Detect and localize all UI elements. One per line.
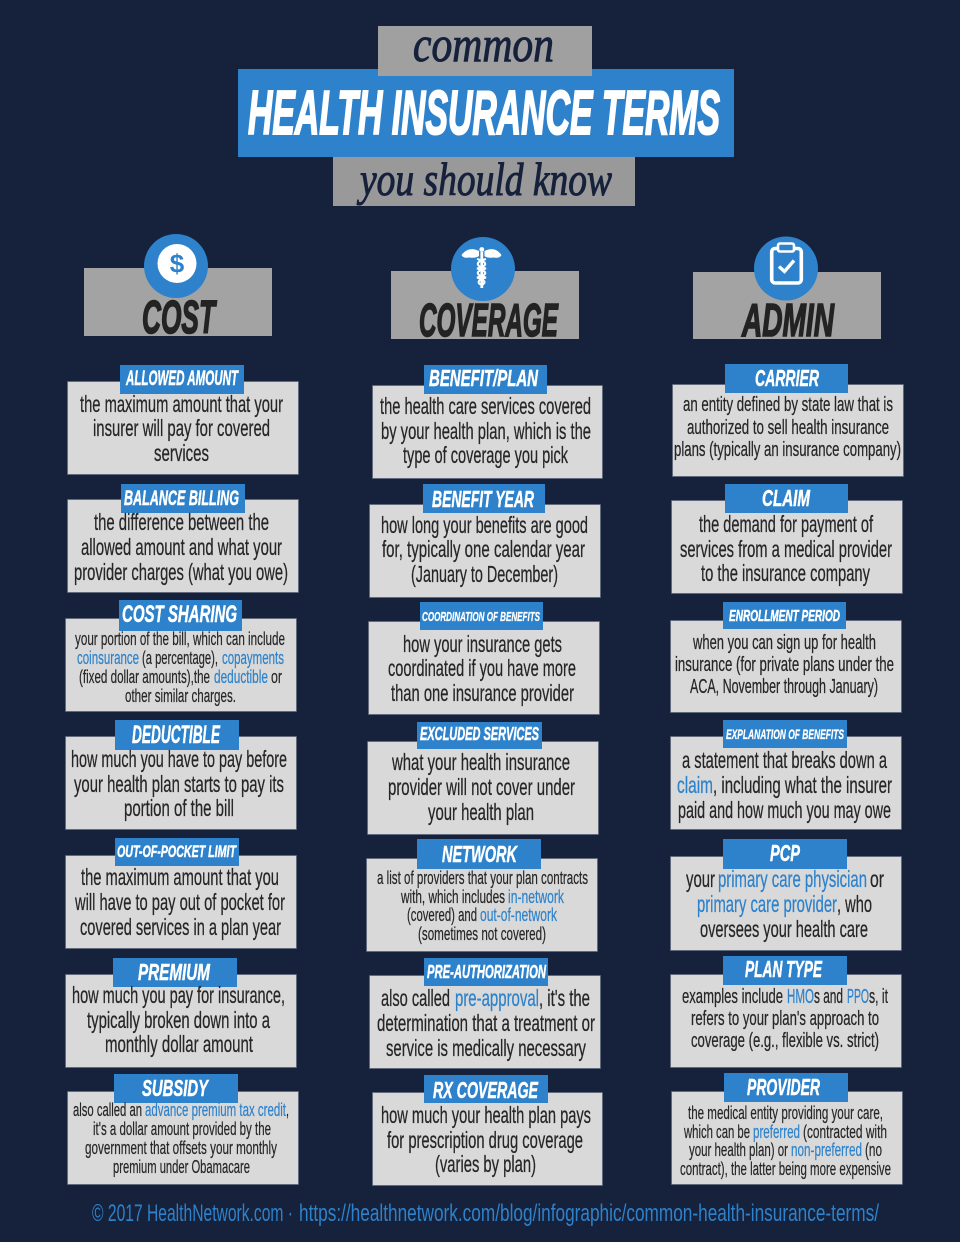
label [723,956,847,985]
definition: (contracted with [803,1122,887,1142]
definition: services [154,440,209,466]
definition: (a percentage), [142,648,218,668]
card: claim [672,484,902,594]
label: SUBSIDY [142,1075,210,1101]
icon: clipboard with check [754,236,818,300]
label [424,365,547,394]
card: enrollment period [670,602,902,712]
definition: , [286,1100,289,1120]
definition: out-of-network [480,905,558,925]
card: premium [66,958,296,1068]
card: allowed amount [68,365,298,474]
label [723,720,847,748]
definition: or [271,667,282,687]
definition [680,1103,891,1179]
definition: claim [677,772,713,798]
card: pcp [670,839,902,950]
column header: admin: ADMIN [741,294,834,346]
card: pre-authorization [370,958,600,1068]
label [424,1075,548,1103]
label [417,839,541,869]
card: deductible [66,720,296,830]
definition [674,394,901,461]
card: out-of-pocket limit [66,838,296,948]
card: coordination of benefits [368,602,600,714]
definition: for prescription drug coverage [387,1127,583,1153]
definition: premium under Obamacare [113,1157,250,1177]
icon: dollar sign: $ [170,248,185,278]
definition: by your health plan, which is the [381,418,591,444]
definition: to the insurance company [701,560,870,586]
definition: portion of the bill [124,795,234,821]
definition: covered services in a plan year [80,914,281,940]
definition: (varies by plan) [435,1151,536,1177]
definition [80,391,283,466]
card: benefit/plan [372,365,602,478]
definition [72,982,285,1057]
definition: how much your health plan pays [381,1102,591,1128]
definition: oversees your health care [700,916,868,942]
definition: , it's the [539,985,590,1011]
column header: admin [693,236,881,346]
label [115,838,239,866]
card: excluded services [368,722,598,834]
definition: with, which includes [400,887,505,907]
label: ENROLLMENT PERIOD [729,608,840,625]
label [114,1074,238,1103]
label: EXPLANATION OF BENEFITS [726,726,844,742]
definition [388,749,575,825]
footer source line [92,1200,879,1227]
label: CLAIM [762,485,811,511]
definition [73,1100,289,1177]
label: PROVIDER [747,1074,820,1100]
title block [238,16,734,206]
definition: primary care provider [697,891,837,917]
label [725,364,848,393]
definition [381,1102,591,1177]
label: BENEFIT/PLAN [429,365,538,391]
definition: your portion of the bill, which can include [75,629,285,649]
definition: a list of providers that your plan contracts [377,868,588,888]
definition: deductible [214,667,268,687]
definition: PPO [847,986,869,1008]
definition: preferred [753,1122,800,1142]
label: OUT-OF-POCKET LIMIT [117,842,237,861]
label [723,839,847,869]
label: NETWORK [442,841,518,867]
definition: type of coverage you pick [403,442,568,468]
definition: your [686,866,715,892]
label [724,1073,848,1102]
label: ALLOWED AMOUNT [125,367,239,390]
definition [380,393,591,468]
title: you should know: you should know [357,154,612,206]
label: PCP [770,840,800,866]
definition: your health plan [428,799,534,825]
title: health insurance terms [238,69,734,157]
definition: will have to pay out of pocket for [74,889,285,915]
definition: s and [814,986,843,1008]
definition [686,866,884,942]
definition: (sometimes not covered) [418,924,546,944]
column header: coverage: COVERAGE [419,294,559,346]
definition: (January to December) [411,561,558,587]
definition: allowed amount and what your [81,534,282,560]
definition: how long your benefits are good [381,512,588,538]
column header: cost [84,234,272,343]
definition: determination that a treatment or [377,1010,595,1036]
definition [680,511,892,586]
footer source line: © 2017 HealthNetwork.com · [92,1200,293,1227]
definition: monthly dollar amount [105,1031,253,1057]
card: cost sharing [66,600,296,712]
definition: s, it [869,986,888,1008]
card: carrier [672,364,904,476]
definition: , who [837,891,872,917]
definition: provider charges (what you owe) [74,559,288,585]
definition: how much you pay for insurance, [72,982,285,1008]
definition: government that offsets your monthly [85,1138,277,1158]
card: explanation of benefits [670,720,902,830]
definition [75,629,285,706]
definition [74,864,285,940]
definition [381,512,588,587]
icon: caduceus [451,237,515,301]
definition: service is medically necessary [386,1035,586,1061]
label: COST SHARING [122,601,237,628]
definition [682,986,888,1052]
label [725,484,848,513]
definition: the maximum amount that your [80,391,283,417]
definition: non-preferred [791,1140,862,1160]
label [420,602,543,630]
column header: coverage [391,237,579,346]
column header: cost: COST [142,291,217,343]
definition [377,985,595,1061]
definition [377,868,588,944]
label: COORDINATION OF BENEFITS [422,609,540,624]
definition: examples include [682,986,783,1008]
definition: what your health insurance [391,749,570,775]
label: CARRIER [755,365,819,391]
label: BENEFIT YEAR [432,486,534,512]
icon: dollar sign [144,234,208,298]
label: DEDUCTIBLE [132,721,221,749]
definition: (covered) and [407,905,477,925]
definition: your health plan) or [689,1140,788,1160]
definition: insurer will pay for covered [93,415,270,441]
definition: in-network [508,887,565,907]
label [424,958,548,986]
definition: pre-approval [455,985,539,1011]
definition [74,509,288,585]
label: EXCLUDED SERVICES [420,724,539,744]
definition: copayments [222,648,284,668]
definition: advance premium tax credit [145,1100,286,1120]
definition: typically broken down into a [87,1007,270,1033]
card: provider [672,1073,902,1184]
label: PREMIUM [138,959,211,985]
definition [675,632,894,698]
card: subsidy [68,1074,298,1184]
definition [71,746,287,821]
definition: the difference between the [94,509,269,535]
definition: the health care services covered [380,393,591,419]
label: RX COVERAGE [433,1077,538,1103]
definition: it's a dollar amount provided by the [93,1119,271,1139]
title: common: common [413,16,554,72]
definition: other similar charges. [125,686,236,706]
definition: which can be [683,1122,750,1142]
card: balance billing [68,484,298,592]
card: benefit year [370,484,600,598]
label: PLAN TYPE [745,956,822,982]
label [113,958,237,987]
definition: primary care physician [718,866,867,892]
definition: the maximum amount that you [81,864,279,890]
definition [677,747,892,823]
definition [388,631,576,706]
definition: coinsurance [77,648,139,668]
label [121,484,245,513]
card: network [366,839,598,952]
label [119,600,242,631]
definition: your health plan starts to pay its [74,771,284,797]
definition: also called [381,985,450,1011]
definition: also called an [73,1100,142,1120]
label [723,602,846,629]
definition: how your insurance gets [403,631,562,657]
label: PRE-AUTHORIZATION [427,962,547,982]
definition: HMO [787,986,814,1008]
definition: than one insurance provider [391,680,574,706]
label [423,484,545,513]
label [417,722,542,749]
label [115,720,239,750]
card: plan type [670,956,902,1068]
definition: (fixed dollar amounts),the [79,667,210,687]
definition: or [870,866,884,892]
definition: (no [865,1140,882,1160]
card: rx coverage [372,1075,602,1186]
definition: provider will not cover under [388,774,575,800]
label [120,365,244,394]
definition: how much you have to pay before [71,746,287,772]
label: BALANCE BILLING [124,487,239,510]
definition: coordinated if you have more [388,655,576,681]
definition: for, typically one calendar year [382,536,585,562]
